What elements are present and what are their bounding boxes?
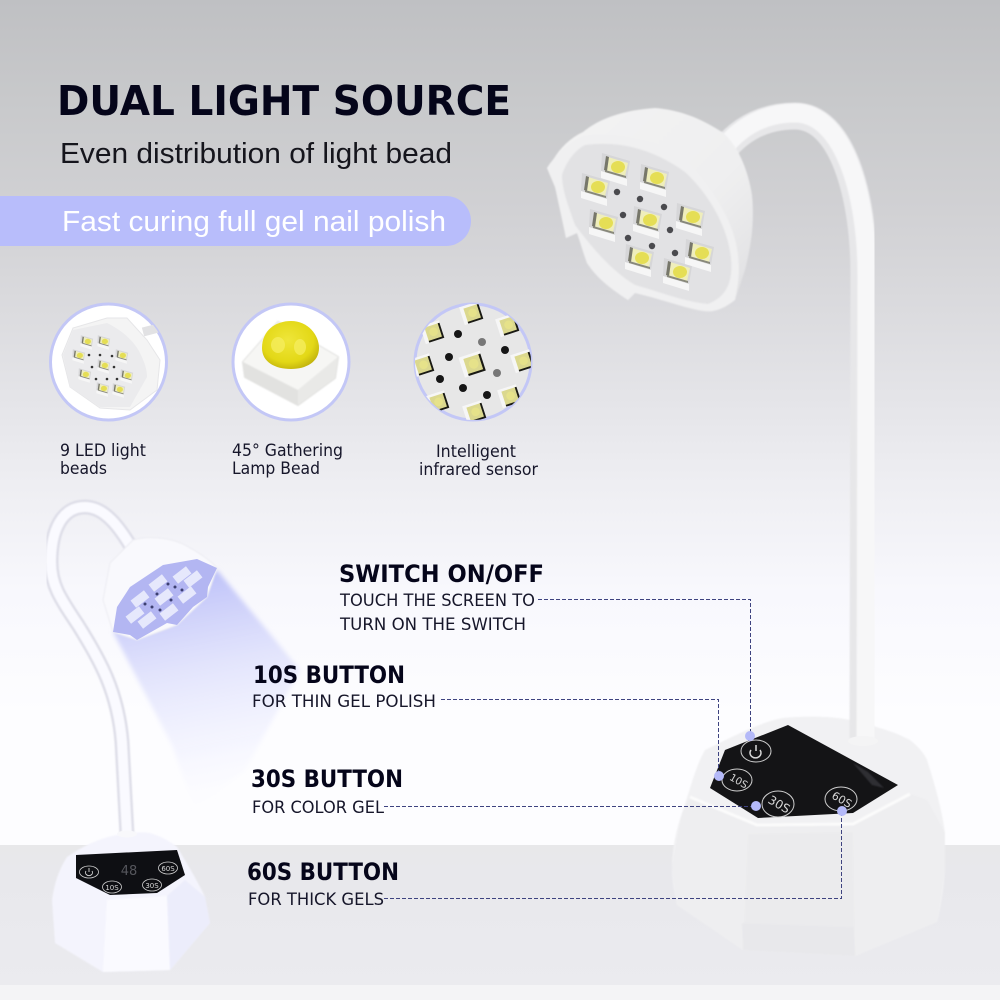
30S button: 30S — [145, 882, 159, 890]
10S button: 10S — [105, 884, 119, 892]
feature label: infrared sensor: infrared sensor — [419, 460, 538, 480]
30S button — [142, 879, 162, 891]
title: DUAL LIGHT SOURCE — [57, 77, 511, 125]
lit beads — [126, 566, 202, 629]
small lamp: head — [103, 538, 217, 640]
small lamp: base — [52, 830, 210, 972]
callout: switch on/off: TOUCH THE SCREEN TO — [339, 591, 535, 611]
60S button: 60S — [829, 789, 854, 811]
lit face — [113, 559, 217, 640]
small lamp: gooseneck — [51, 507, 133, 835]
callout: 30S button: FOR COLOR GEL — [252, 798, 384, 818]
small lamp: light beam — [113, 570, 300, 810]
sensor holes — [144, 582, 184, 612]
callout: switch on/off — [339, 560, 544, 635]
callout: 10S button: FOR THIN GEL POLISH — [252, 692, 436, 712]
feature label: infrared sensor — [419, 442, 538, 480]
power button — [80, 866, 98, 878]
feature: 45 degree lamp bead — [233, 304, 349, 420]
60S button — [825, 787, 857, 811]
feature label: 45 degree: Lamp Bead — [232, 459, 320, 479]
10S button: 10S — [727, 772, 749, 791]
10S button — [102, 881, 122, 893]
callout: 30S button: 30S BUTTON — [251, 765, 403, 793]
feature label: 9 LED — [60, 441, 146, 479]
subtitle: Even distribution of light bead — [60, 138, 452, 170]
feature label: 45 degree: 45° Gathering — [232, 441, 343, 461]
callout: 60S button — [247, 858, 399, 910]
sensor holes — [614, 189, 678, 256]
power button — [741, 740, 771, 762]
callout: 10S button — [252, 661, 436, 712]
lamp beads — [581, 153, 714, 291]
callout lines — [384, 600, 842, 898]
main lamp: touch panel — [710, 725, 898, 818]
10S button — [722, 769, 752, 791]
feature label: 9 LED: beads — [60, 459, 107, 479]
main lamp: base — [672, 717, 945, 956]
feature: 9 LED light beads — [50, 304, 170, 420]
digital display: 48 — [121, 864, 137, 879]
main lamp: tube collar — [848, 736, 878, 746]
60S button: 60S — [161, 865, 175, 873]
main lamp: head — [547, 108, 753, 312]
banner: fast curing — [0, 196, 471, 246]
60S button — [158, 862, 178, 874]
callout: 60S button: FOR THICK GELS — [248, 890, 384, 910]
callout: 30S button — [251, 765, 403, 818]
callout: switch on/off: TURN ON THE SWITCH — [339, 615, 526, 635]
feature label: infrared sensor: Intelligent — [436, 442, 516, 462]
main lamp: gooseneck — [722, 113, 867, 738]
table band — [0, 845, 1000, 1000]
callout: 10S button: 10S BUTTON — [253, 661, 405, 689]
banner: fast curing: Fast curing full gel nail polish — [62, 206, 446, 238]
callout: 60S button: 60S BUTTON — [247, 858, 399, 886]
30S button: 30S — [766, 793, 792, 816]
feature: infrared sensor closeup — [410, 301, 535, 424]
touch panel — [76, 850, 185, 895]
callout dots — [714, 731, 847, 816]
callout: switch on/off: SWITCH ON/OFF — [339, 560, 544, 588]
feature label: 45 degree — [232, 441, 343, 479]
feature label: 9 LED: 9 LED light — [60, 441, 146, 461]
